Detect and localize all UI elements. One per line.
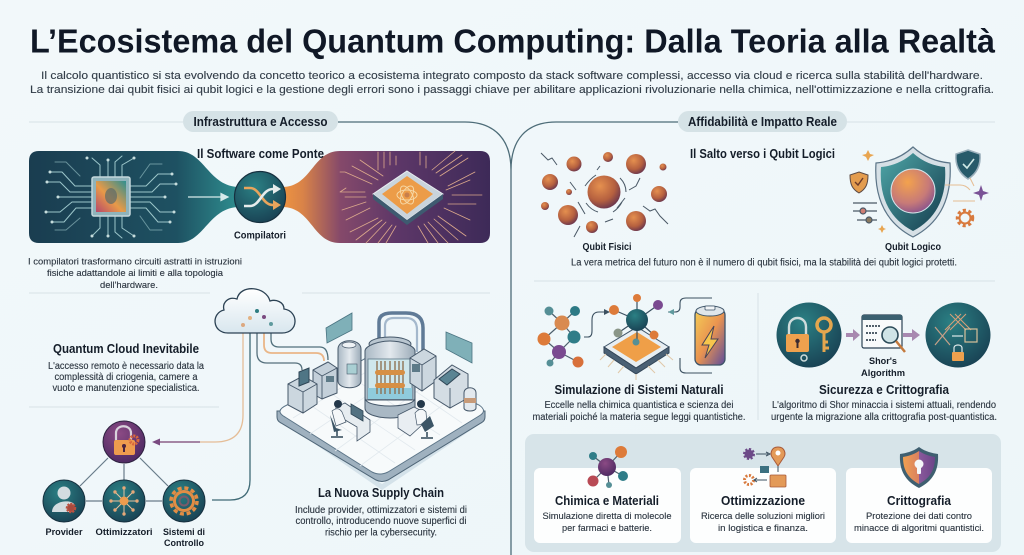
illustration: Shor's algorithm <box>776 302 990 379</box>
cryostat <box>365 313 423 418</box>
panel: applications <box>525 434 1001 552</box>
central curved divider <box>338 122 678 555</box>
small orange shield <box>850 172 868 193</box>
card: Chimica e Materiali: per farmaci e batterie. <box>562 523 652 534</box>
icon: lock and key <box>776 302 842 368</box>
block: Simulazione di Sistemi Naturali: materiali poiché la materia segue leggi quantistiche. <box>532 412 746 423</box>
card: Ottimizzazione: Ricerca delle soluzioni migliori <box>701 511 825 522</box>
illustration: molecular simulation <box>538 294 725 380</box>
block: Sicurezza e Crittografia: Sicurezza e Crittografia <box>819 382 950 397</box>
text: qubit metric: La vera metrica del futuro non è il numero di qubit fisici, ma la stabilità dei qubit logici protetti. <box>571 258 957 268</box>
supply chain labels: Sistemi di <box>163 527 205 538</box>
supply chain labels: Ottimizzatori <box>96 527 152 538</box>
block: Sicurezza e Crittografia: L'algoritmo di Shor minaccia i sistemi attuali, rendendo <box>772 400 996 411</box>
illustration: logical qubit shield <box>850 147 989 237</box>
small teal shield <box>956 150 980 179</box>
card: Crittografia <box>846 447 992 543</box>
card: Ottimizzazione <box>690 447 836 543</box>
panel: software bridge <box>29 147 490 243</box>
intro text: Il calcolo quantistico si sta evolvendo da concetto teorico a ecosistema integrato composto da stack software complessi, accesso via cloud e ricerca sulla stabilità dell'hardware. <box>41 70 983 82</box>
machine <box>434 365 476 411</box>
intro text: La transizione dai qubit fisici ai qubit logici e la gestione degli errori sono i passaggi chiave per abilitare applicazioni rivoluzionarie nella chimica, nell'ottimizzazione e nella crittografia. <box>30 84 994 96</box>
text: compilers description: fisiche adattandole ai limiti e alla topologia <box>47 268 224 279</box>
gear <box>958 210 972 226</box>
card: Ottimizzazione: Ottimizzazione <box>721 493 805 508</box>
heading: Il Salto verso i Qubit Logici: Il Salto verso i Qubit Logici <box>690 147 835 161</box>
block: La Nuova Supply Chain: controllo, introducendo nuove superfici di <box>296 516 466 527</box>
card: Crittografia: Crittografia <box>887 493 952 508</box>
block: Quantum Cloud Inevitabile: L'accesso remoto è necessario data la <box>48 361 204 372</box>
heading: Affidabilità e Impatto Reale: Affidabilità e Impatto Reale <box>688 115 837 129</box>
icon: security lock <box>103 421 145 463</box>
block: Quantum Cloud Inevitabile <box>48 341 204 394</box>
text: compilers description: dell'hardware. <box>100 280 158 291</box>
block: Simulazione di Sistemi Naturali <box>532 382 746 423</box>
heading: Affidabilità e Impatto Reale <box>678 111 847 132</box>
title: L’Ecosistema del Quantum Computing: Dalla Teoria alla Realtà <box>30 24 995 60</box>
supply chain labels: Controllo <box>164 538 204 549</box>
block: Sicurezza e Crittografia: urgente la migrazione alla crittografia post-quantistica. <box>771 412 997 423</box>
card: Ottimizzazione: in logistica e finanza. <box>718 523 808 534</box>
supply chain labels <box>46 527 205 549</box>
block: Sicurezza e Crittografia <box>771 382 997 423</box>
quantum chip <box>600 294 673 380</box>
label: Qubit Logico: Qubit Logico <box>885 242 941 253</box>
label: Compilatori: Compilatori <box>234 230 286 242</box>
icon: post-quantum <box>926 302 990 368</box>
intro text <box>30 70 994 96</box>
illustration: physical qubits <box>541 152 668 237</box>
sliders <box>853 203 877 223</box>
heading: Il Software come Ponte: Il Software come Ponte <box>197 147 324 161</box>
card: Crittografia: minacce di algoritmi quantistici. <box>854 523 984 534</box>
block: Quantum Cloud Inevitabile: complessità di criogenia, camere a <box>54 372 198 383</box>
sparkles and circuit <box>862 150 989 233</box>
icon: control systems <box>163 480 205 522</box>
card: Chimica e Materiali <box>534 446 681 543</box>
card: Chimica e Materiali: Chimica e Materiali <box>555 493 659 508</box>
molecule <box>538 306 610 368</box>
label: Shor's Algorithm: Shor's <box>869 356 897 367</box>
icon: cloud <box>215 289 295 333</box>
platform <box>277 356 486 490</box>
block: Quantum Cloud Inevitabile: Quantum Cloud Inevitabile <box>53 341 199 356</box>
label: Qubit Fisici: Qubit Fisici <box>582 242 632 253</box>
label: Shor's Algorithm <box>861 356 905 379</box>
block: Quantum Cloud Inevitabile: vuoto e manutenzione specialistica. <box>52 383 200 394</box>
block: La Nuova Supply Chain: rischio per la cybersecurity. <box>325 528 437 538</box>
heading: Infrastruttura e Accesso <box>183 111 338 132</box>
block: La Nuova Supply Chain: La Nuova Supply Chain <box>318 486 444 500</box>
operators <box>330 400 434 441</box>
block: Simulazione di Sistemi Naturali: Eccelle nella chimica quantistica e scienza dei <box>544 400 734 411</box>
racks <box>288 349 436 413</box>
card: Crittografia: Protezione dei dati contro <box>866 511 972 522</box>
illustration: quantum lab <box>277 313 486 490</box>
icon: compiler <box>234 172 286 222</box>
text: compilers description: I compilatori trasformano circuiti astratti in istruzioni <box>28 256 242 268</box>
left desk <box>330 400 370 441</box>
card: Chimica e Materiali: Simulazione diretta di molecole <box>542 511 672 522</box>
block: La Nuova Supply Chain: Include provider, ottimizzatori e sistemi di <box>295 505 467 516</box>
battery <box>668 298 725 373</box>
holographic screens <box>326 313 472 363</box>
text: compilers description <box>28 256 242 291</box>
icon: provider <box>43 480 85 522</box>
block: Simulazione di Sistemi Naturali: Simulazione di Sistemi Naturali <box>554 382 724 397</box>
quantum chip panel <box>282 151 490 243</box>
right desk <box>398 400 434 438</box>
classical circuit panel <box>29 151 240 243</box>
diagram: supply chain network <box>43 421 205 549</box>
cloud connection lines <box>152 311 328 500</box>
block: La Nuova Supply Chain <box>295 486 467 538</box>
icon: code window <box>862 315 905 352</box>
heading: Infrastruttura e Accesso: Infrastruttura e Accesso <box>194 115 328 129</box>
supply chain labels: Provider <box>46 527 83 538</box>
label: Shor's Algorithm: Algorithm <box>861 368 905 379</box>
tank <box>338 341 361 388</box>
arrows <box>846 329 920 341</box>
icon: optimisers <box>103 480 145 522</box>
